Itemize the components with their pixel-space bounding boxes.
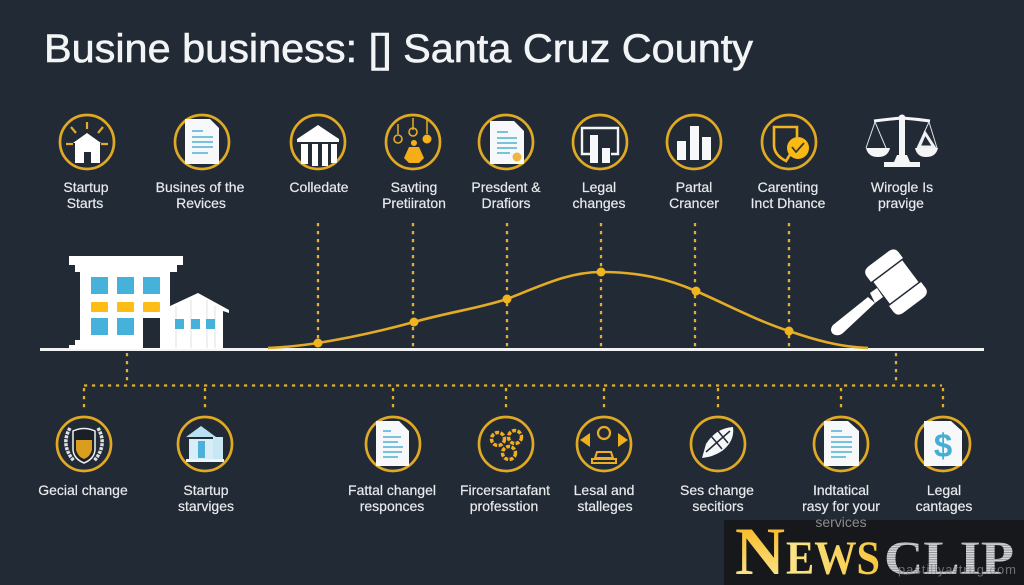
bottom item: startup starviges [178,417,234,514]
timeline connectors [84,223,943,412]
top item: legal changes: changes [573,195,625,211]
top item: partal crancer [667,115,721,211]
bottom item: legal cantages: Legal [927,482,961,498]
top item: carenting inct dhance: Inct Dhance [751,195,826,211]
title: Busine business: [] Santa Cruz County [44,27,753,71]
top item: savting pretiiraton: Savting [391,179,437,195]
top item: scales, wirogle is pravige: Wirogle Is [871,179,933,195]
top item: startup starts [60,115,114,211]
bottom item: fatal changel responces [348,417,436,514]
bottom item: ses change secitiors [680,417,754,514]
bottom item: gecial change: Gecial change [38,482,128,498]
bottom item: indtatical rasy for your services [802,417,880,514]
icon: gavel [831,247,929,335]
top item: colledate [289,115,349,195]
bottom item: lesal and stalleges [574,417,634,514]
top item: president and drafiors: Drafiors [481,195,531,211]
bottom item: startup starviges: starviges [178,498,234,514]
top item: colledate: Colledate [289,179,349,195]
bottom item: startup starviges: Startup [183,482,229,498]
bottom item: legal cantages: cantages [916,498,972,514]
top item: carenting inct dhance: Carenting [758,179,818,195]
growth curve [268,268,868,348]
top item: scales, wirogle is pravige [866,114,938,211]
faded label: services: services [815,514,867,530]
top item: legal changes: Legal [582,179,616,195]
bottom item: fircersartafant profession: professtion [470,498,538,514]
top item: business of the revices [156,115,245,211]
top item: business of the revices: Busines of the [156,179,245,195]
logo: newsclip: EWS [786,532,880,585]
top item: partal crancer: Crancer [669,195,719,211]
logo: newsclip [724,513,1024,585]
bottom item: lesal and stalleges: stalleges [577,498,633,514]
top item: startup starts: Startup [63,179,109,195]
bottom item: fatal changel responces: responces [360,498,424,514]
top item: carenting inct dhance [751,115,826,211]
bottom item: fircersartafant profession [460,417,550,514]
bottom item: ses change secitiors: Ses change [680,482,754,498]
bottom item: legal cantages: $ [934,427,952,464]
top item: savting pretiiraton [382,115,446,211]
top item: president and drafiors: Presdent & [471,179,541,195]
top item: scales, wirogle is pravige: pravige [878,195,924,211]
icon: office building and house [69,256,229,349]
top item: partal crancer: Partal [676,179,712,195]
timeline baseline [40,348,984,351]
bottom item: indtatical rasy for your services: rasy for your [802,498,880,514]
top item: legal changes [573,115,627,211]
bottom item: indtatical rasy for your services: Indtatical [813,482,869,498]
top item: president and drafiors [471,115,541,211]
bottom item: fatal changel responces: Fattal changel [348,482,436,498]
top item: savting pretiiraton: Pretiiraton [382,195,446,211]
bottom item: lesal and stalleges: Lesal and [574,482,634,498]
bottom item: legal cantages [916,417,972,514]
bottom item: gecial change [38,417,128,498]
top item: startup starts: Starts [67,195,103,211]
bottom item: ses change secitiors: secitiors [692,498,744,514]
bottom item: fircersartafant profession: Fircersartafant [460,482,550,498]
logo: newsclip: pastillyartrug.com [898,562,1016,577]
top item: business of the revices: Revices [176,195,226,211]
logo: newsclip: CLIP [884,532,1014,585]
